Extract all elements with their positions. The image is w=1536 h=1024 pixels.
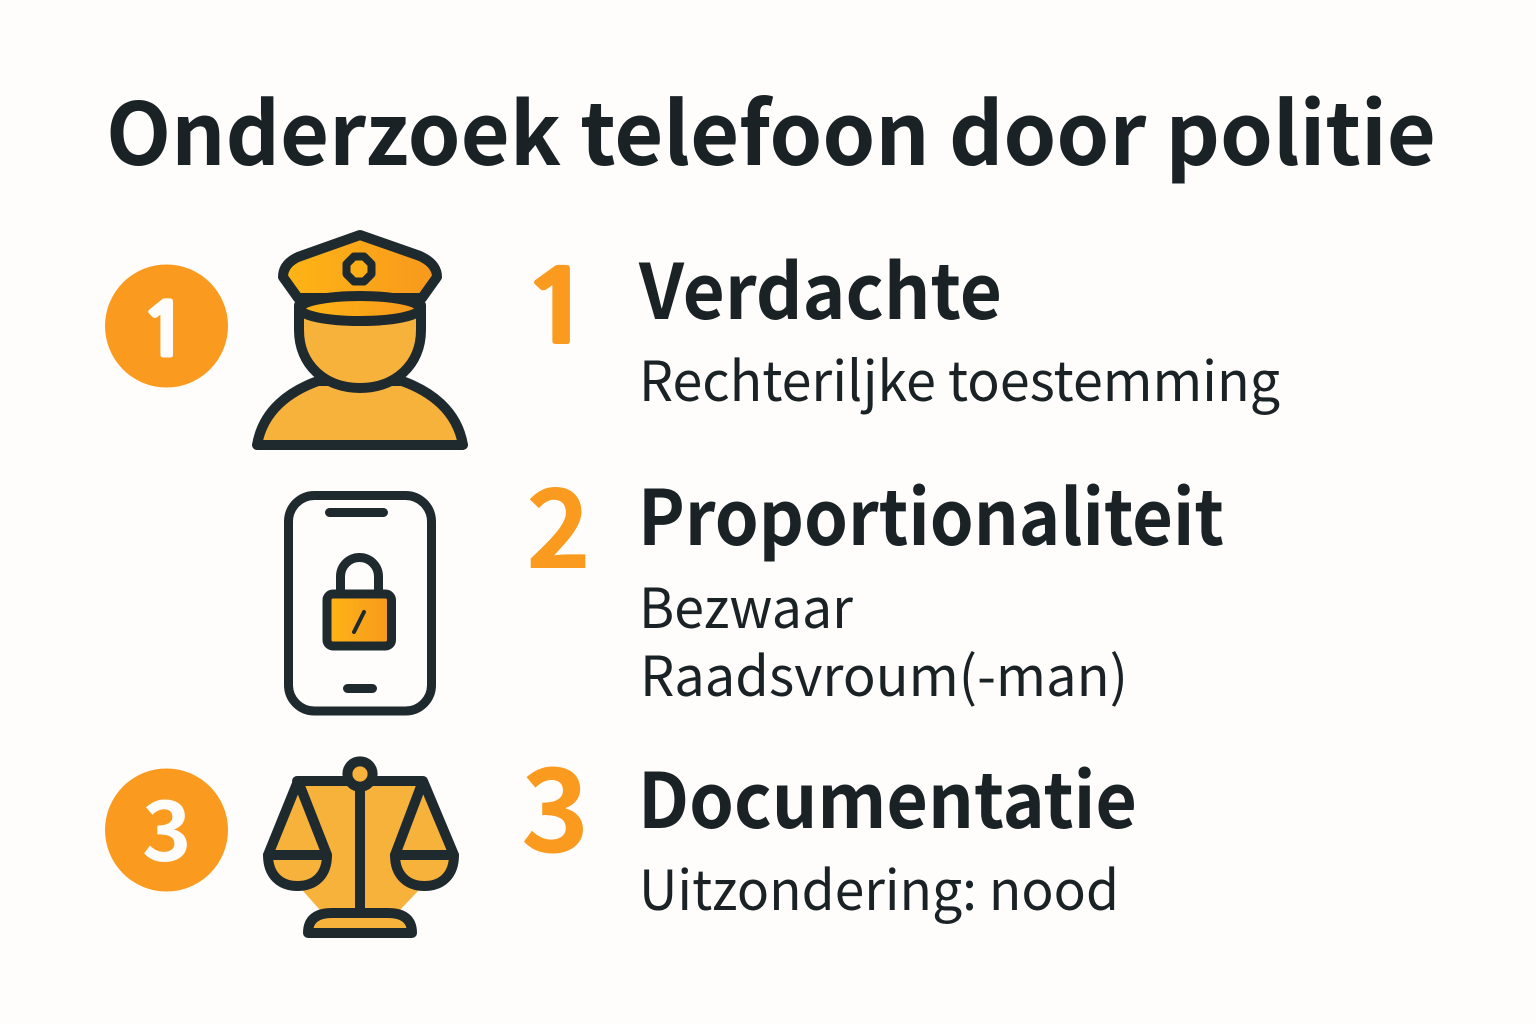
heading: Documentatie: Documentatie	[638, 740, 1137, 850]
text: Rechterlijke toestemming: Rechteriljke toestemming	[639, 337, 1280, 417]
number 2: 2	[526, 440, 591, 600]
title: Onderzoek telefoon door politie	[106, 65, 1436, 190]
number 1: 1	[520, 258, 597, 358]
heading: Proportionaliteit: Proportionaliteit	[638, 457, 1224, 567]
icon: police officer	[257, 235, 463, 445]
badge: number 3	[105, 765, 228, 892]
badge: number 1	[105, 264, 228, 388]
number 3: 3	[521, 718, 589, 886]
badge: number 3: 3	[142, 765, 192, 886]
text: Bezwaar: Bezwaar	[639, 564, 854, 644]
text: Raadsvrouw: Raadsvroum(-man)	[640, 632, 1128, 712]
icon: scales of justice	[267, 761, 455, 933]
icon: locked phone	[288, 496, 432, 711]
text: Uitzondering: nood: Uitzondering: nood	[639, 846, 1119, 926]
badge: number 1: 1	[139, 294, 191, 367]
heading: Verdachte: Verdachte	[638, 231, 1002, 341]
